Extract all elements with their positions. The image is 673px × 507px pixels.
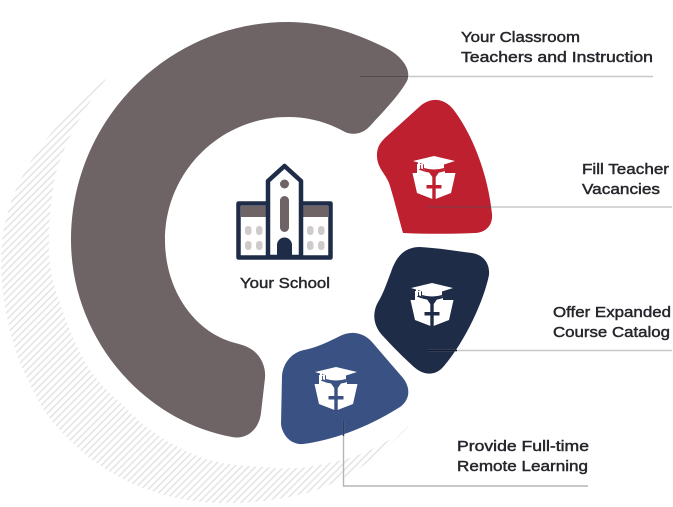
- icon: school building: [238, 166, 330, 258]
- icon: cap and book, blue: [314, 367, 358, 411]
- label: offer expanded course catalog: [553, 304, 671, 341]
- leader line: remote learning: [344, 421, 588, 486]
- leader line: teacher vacancies: [427, 206, 672, 208]
- label: your classroom: [461, 29, 653, 66]
- label: your classroom: Teachers and Instruction: [461, 49, 653, 66]
- blue blob: provide full-time remote learning: [281, 333, 408, 444]
- hatched crescent background: [1, 78, 410, 503]
- red blob: fill teacher vacancies: [377, 100, 492, 234]
- label: fill teacher vacancies: [582, 161, 669, 198]
- icon: cap and book, red: [412, 156, 456, 200]
- label: provide full-time remote learning: [457, 438, 589, 475]
- label: provide full-time remote learning: Remote Learning: [457, 458, 588, 475]
- label: your classroom: Your Classroom: [461, 29, 580, 46]
- gray ring: your classroom: [71, 22, 408, 438]
- icon: cap and book, navy: [410, 283, 454, 327]
- leader line: course catalog: [428, 350, 672, 352]
- label: offer expanded course catalog: Offer Expanded: [553, 304, 671, 321]
- navy blob: offer expanded course catalog: [374, 247, 489, 374]
- label: your school: Your School: [240, 275, 330, 292]
- leader line: classroom: [360, 76, 653, 78]
- label: offer expanded course catalog: Course Catalog: [553, 324, 670, 341]
- label: provide full-time remote learning: Provide Full-time: [457, 438, 589, 455]
- label: fill teacher vacancies: Fill Teacher: [582, 161, 669, 178]
- label: fill teacher vacancies: Vacancies: [582, 181, 660, 198]
